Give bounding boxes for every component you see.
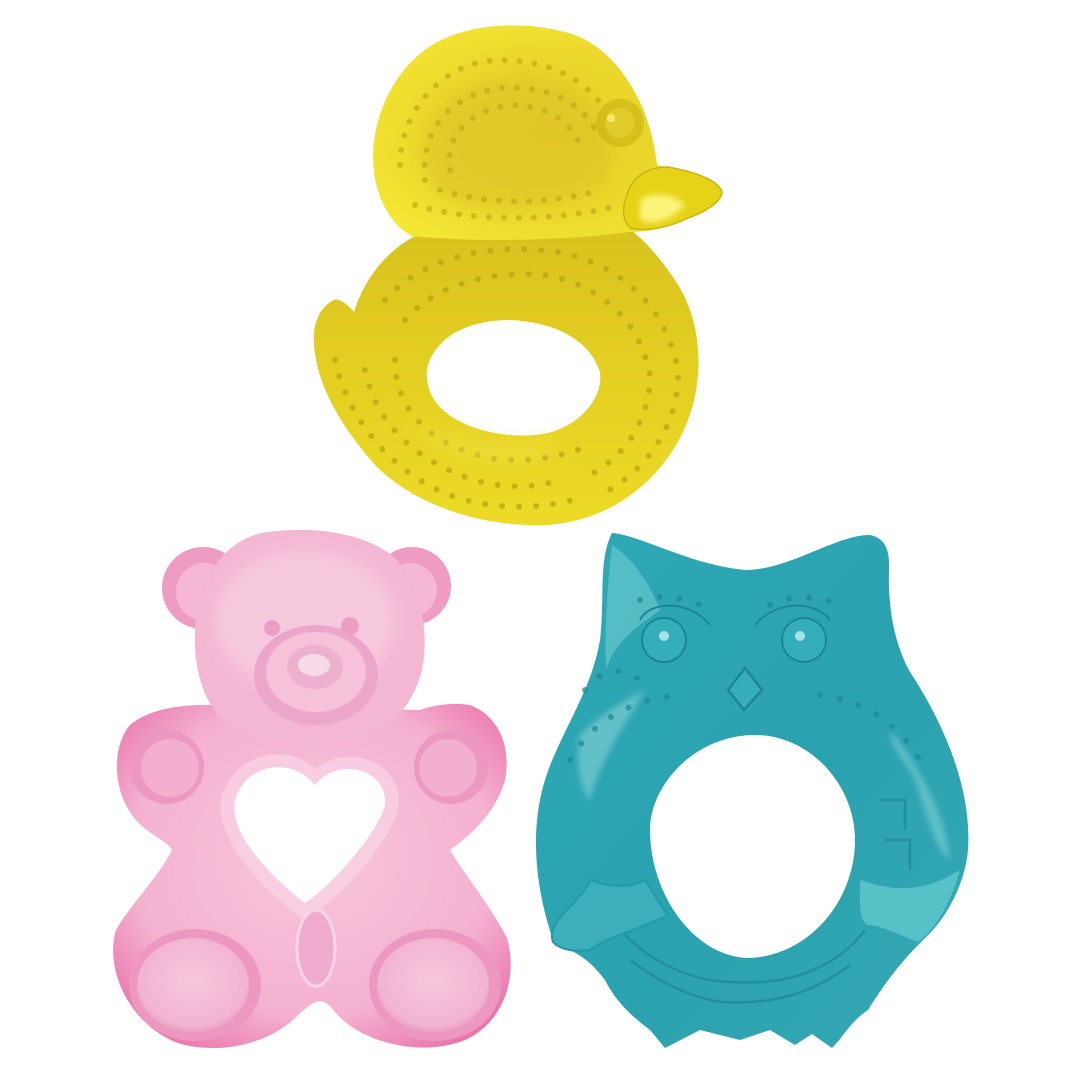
owl right highlight: [890, 730, 950, 860]
bear head: [195, 530, 425, 743]
duck eye: [596, 99, 644, 147]
owl body silhouette: [536, 533, 968, 1048]
bear paws: [130, 730, 488, 804]
owl body dots: [570, 597, 925, 770]
owl left wing: [552, 880, 668, 951]
bear heart rim: [228, 761, 392, 912]
duck body ring: [314, 225, 699, 525]
owl left highlight: [578, 690, 645, 800]
duck body highlight: [410, 420, 560, 460]
bear ears: [162, 547, 451, 629]
bear body silhouette: [113, 704, 511, 1048]
bear heart hole: [234, 767, 385, 903]
teether: yellow duck: [314, 25, 722, 525]
owl right wing: [860, 870, 960, 942]
bear bow: [297, 910, 335, 986]
duck head inner panel: [422, 74, 612, 208]
duck head dots: [400, 60, 620, 218]
teether: teal owl: [536, 533, 968, 1048]
owl eyes: [640, 606, 830, 662]
bear head glow: [215, 550, 395, 690]
duck head: [373, 25, 722, 240]
duck body dots: [335, 249, 678, 507]
bear snout: [254, 617, 378, 725]
owl beak: [728, 668, 762, 710]
teether: pink bear: [113, 530, 511, 1048]
duck beak: [624, 167, 722, 230]
owl bottom waves: [625, 800, 910, 1003]
bear feet: [129, 929, 501, 1041]
owl ear highlight: [605, 545, 660, 670]
